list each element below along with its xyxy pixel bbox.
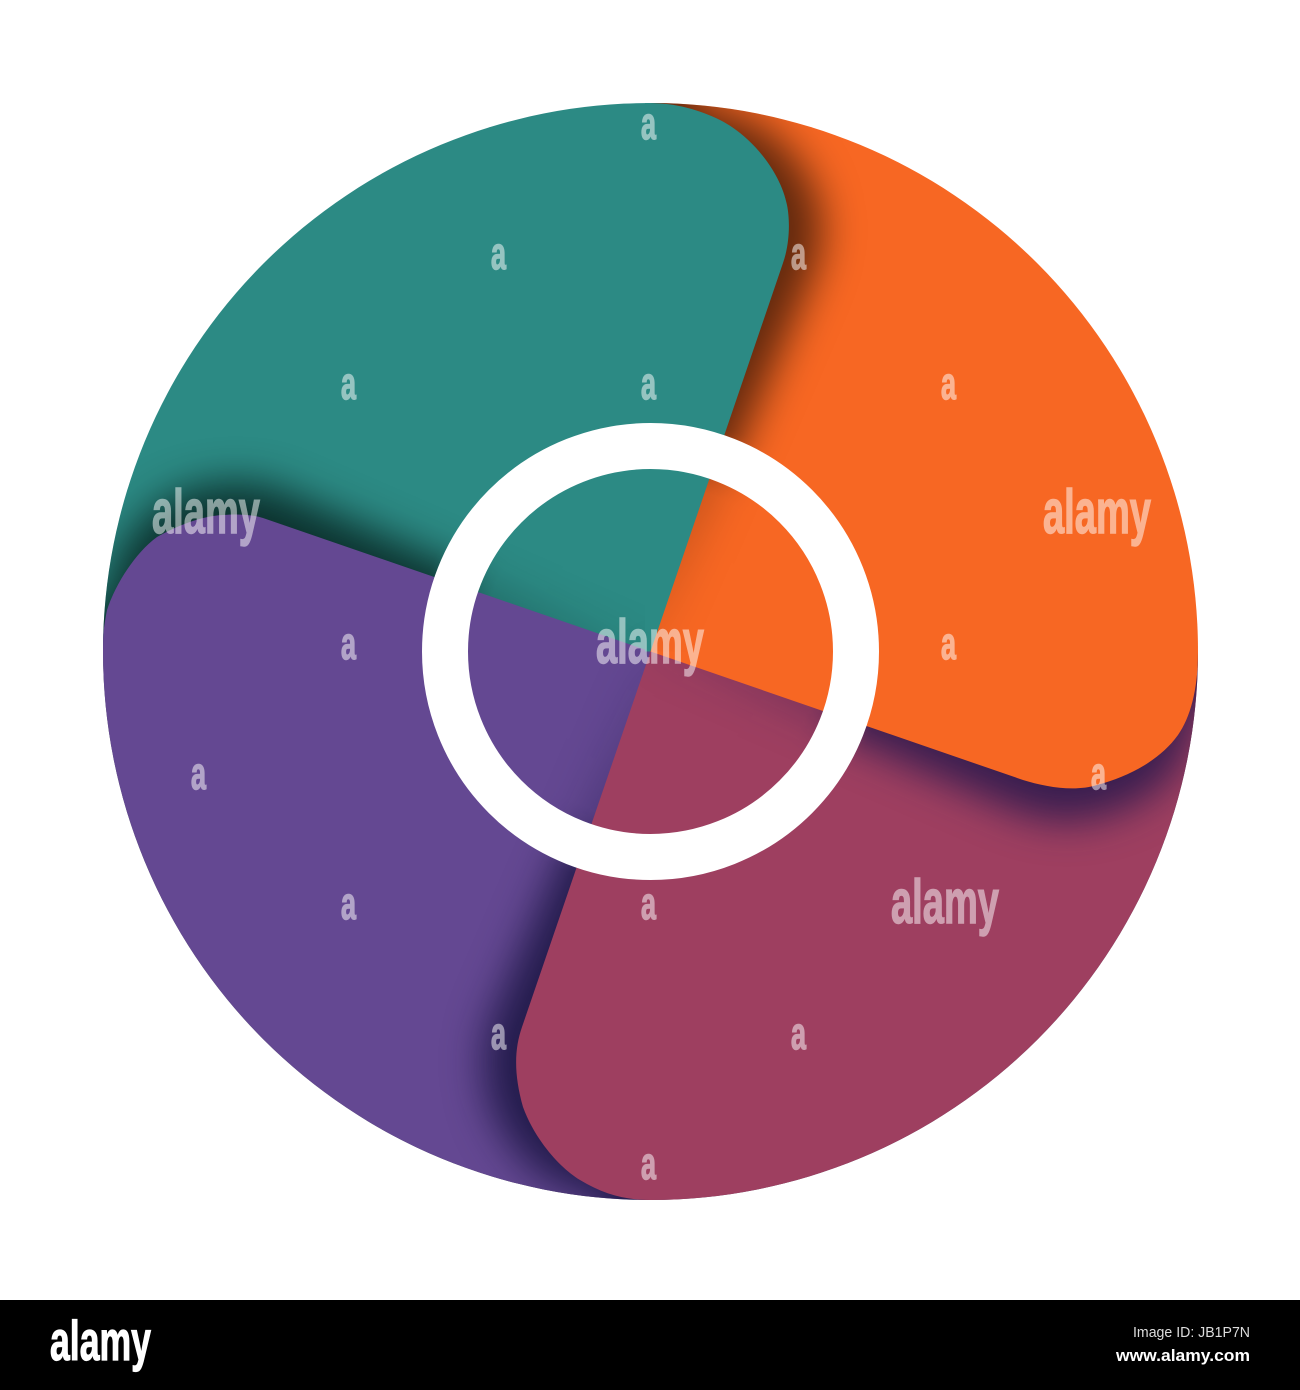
watermarks: alamy bbox=[891, 868, 999, 937]
segment: teal overlap on orange bbox=[645, 103, 789, 652]
watermarks: a bbox=[341, 878, 357, 929]
circular diagram bbox=[103, 103, 1198, 1200]
website: www.alamy.com bbox=[1115, 1346, 1250, 1365]
watermarks: a bbox=[641, 98, 657, 149]
footer logo: alamy bbox=[50, 1309, 151, 1372]
white centre ring bbox=[445, 446, 856, 857]
footer bar bbox=[0, 1300, 1300, 1390]
watermarks: a bbox=[191, 748, 207, 799]
segment: purple bbox=[80, 514, 650, 1220]
watermarks: a bbox=[941, 358, 957, 409]
segment: maroon bbox=[516, 652, 1220, 1220]
watermarks: a bbox=[341, 358, 357, 409]
segment: orange bbox=[650, 80, 1220, 788]
watermarks: a bbox=[641, 358, 657, 409]
watermarks: alamy bbox=[152, 478, 260, 547]
watermarks: a bbox=[641, 878, 657, 929]
watermarks: a bbox=[641, 1138, 657, 1189]
shadow: orange on maroon bbox=[681, 654, 1198, 847]
watermarks: a bbox=[491, 1008, 507, 1059]
image id: Image ID: JB1P7N bbox=[1133, 1324, 1250, 1341]
shadow: teal on orange bbox=[651, 103, 851, 633]
shadow: maroon on purple bbox=[462, 681, 1198, 1200]
shadow: purple on teal bbox=[103, 458, 621, 1200]
watermarks: alamy bbox=[596, 608, 704, 677]
watermarks: a bbox=[941, 618, 957, 669]
watermarks: alamy bbox=[1043, 478, 1151, 547]
watermarks: a bbox=[1091, 748, 1107, 799]
watermarks bbox=[152, 98, 1151, 1189]
watermarks: a bbox=[341, 618, 357, 669]
watermarks: a bbox=[491, 228, 507, 279]
watermarks: a bbox=[791, 228, 807, 279]
segment: teal base bbox=[103, 103, 649, 650]
watermarks: a bbox=[791, 1008, 807, 1059]
